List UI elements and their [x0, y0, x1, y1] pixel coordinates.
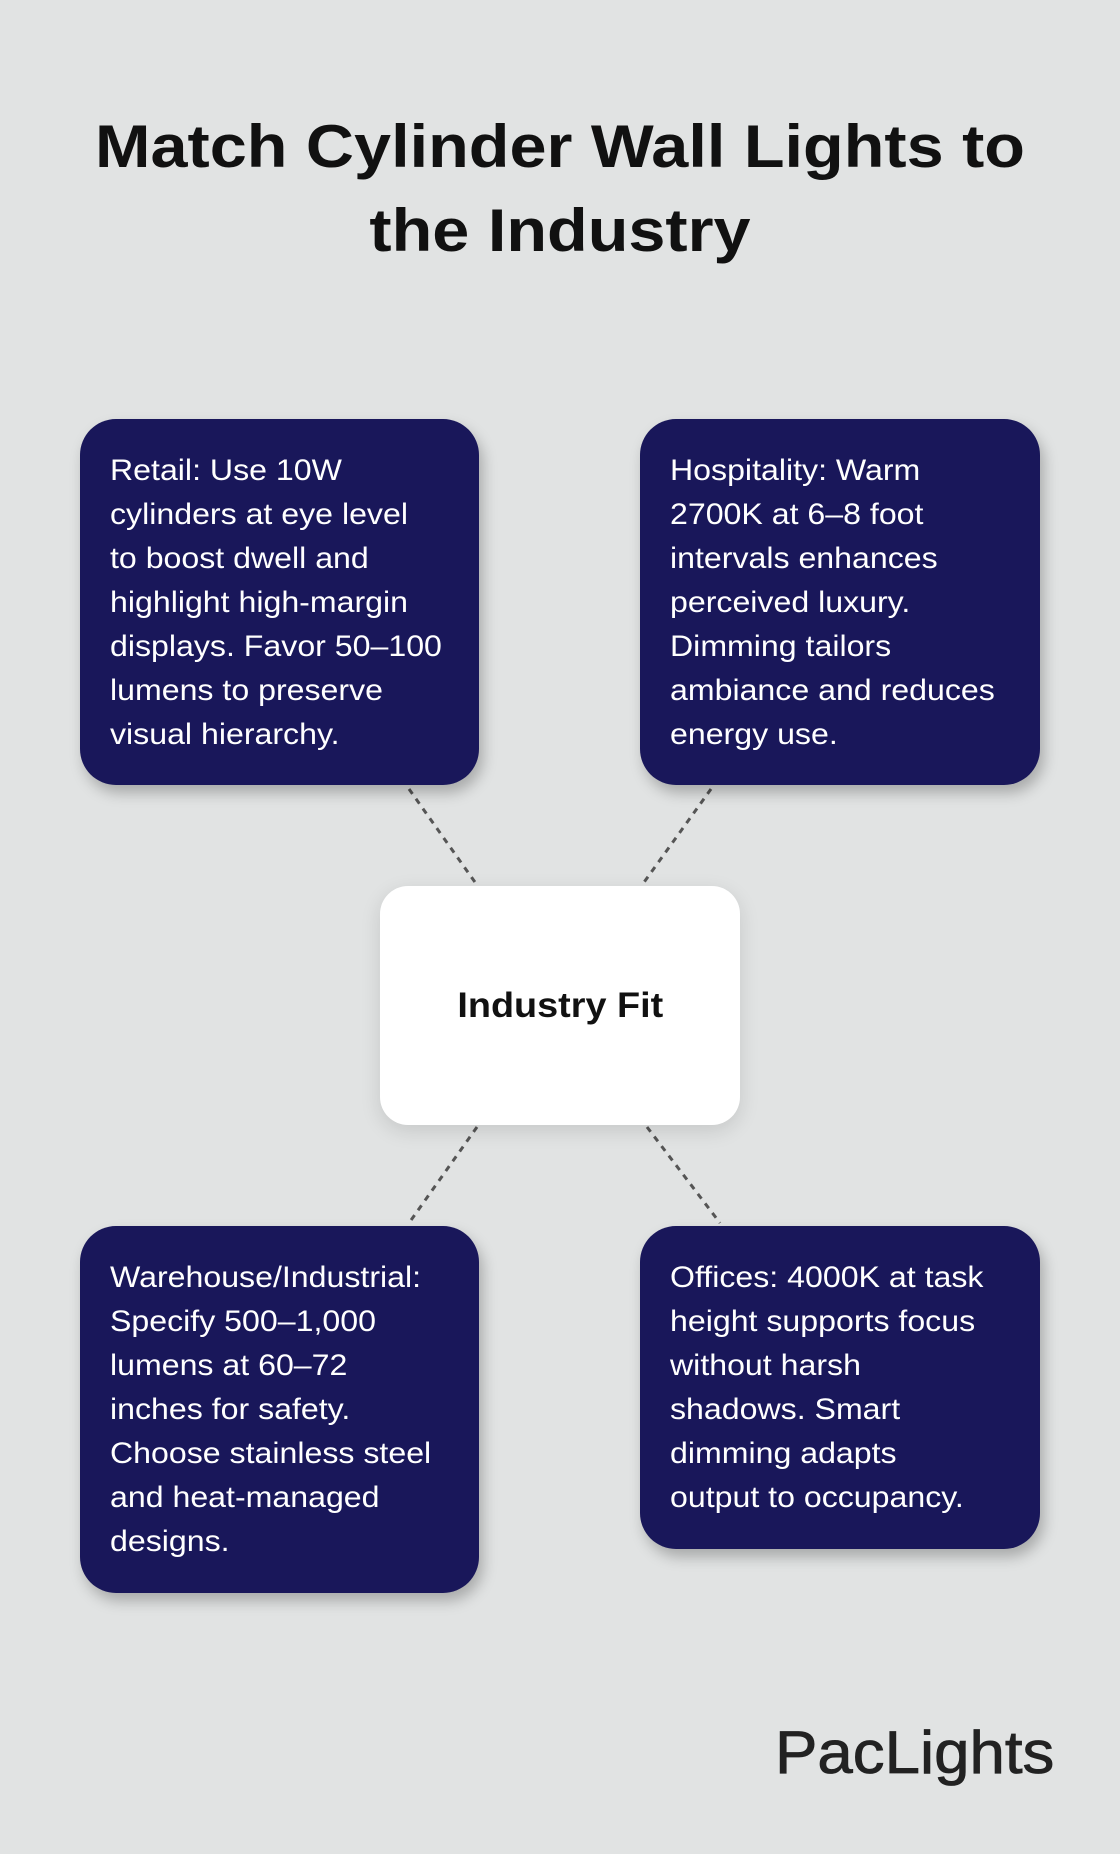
panel: warehouse: [80, 1226, 479, 1593]
panel: retail: [80, 419, 479, 785]
panel: retail: lumens to preserve: [110, 674, 383, 707]
panel: offices: height supports focus: [670, 1305, 975, 1338]
panel: hospitality: 2700K at 6–8 foot: [670, 498, 923, 531]
panel: offices: Offices: 4000K at task: [670, 1261, 983, 1294]
panel: warehouse: Specify 500–1,000: [110, 1305, 376, 1338]
panel: retail: cylinders at eye level: [110, 498, 408, 531]
panel: retail: displays. Favor 50–100: [110, 630, 442, 663]
panel: hospitality: intervals enhances: [670, 542, 938, 575]
panel: hospitality: Dimming tailors: [670, 630, 891, 663]
panel: warehouse: designs.: [110, 1525, 230, 1558]
panel: offices: [640, 1226, 1040, 1549]
panel: offices: shadows. Smart: [670, 1393, 900, 1426]
panel: hospitality: [640, 419, 1040, 785]
panel: retail: Retail: Use 10W: [110, 454, 342, 487]
panel: offices: dimming adapts: [670, 1437, 897, 1470]
center node: [380, 886, 740, 1125]
panel: offices: without harsh: [670, 1349, 861, 1382]
panel: hospitality: ambiance and reduces: [670, 674, 995, 707]
panel: warehouse: lumens at 60–72: [110, 1349, 347, 1382]
panel: hospitality: perceived luxury.: [670, 586, 910, 619]
panel: hospitality: Hospitality: Warm: [670, 454, 920, 487]
panel: warehouse: Warehouse/Industrial:: [110, 1261, 421, 1294]
logo: PacLights: [775, 1719, 1054, 1786]
panel: offices: output to occupancy.: [670, 1481, 964, 1514]
panel: retail: visual hierarchy.: [110, 718, 340, 751]
panel: hospitality: energy use.: [670, 718, 838, 751]
title: Match Cylinder Wall Lights to: [95, 113, 1025, 180]
panel: warehouse: Choose stainless steel: [110, 1437, 431, 1470]
panel: warehouse: inches for safety.: [110, 1393, 350, 1426]
panel: warehouse: and heat-managed: [110, 1481, 380, 1514]
title: [95, 113, 1025, 264]
panel: retail: to boost dwell and: [110, 542, 369, 575]
center node: Industry Fit: [457, 986, 663, 1024]
panel: retail: highlight high-margin: [110, 586, 408, 619]
title: the Industry: [369, 197, 751, 264]
